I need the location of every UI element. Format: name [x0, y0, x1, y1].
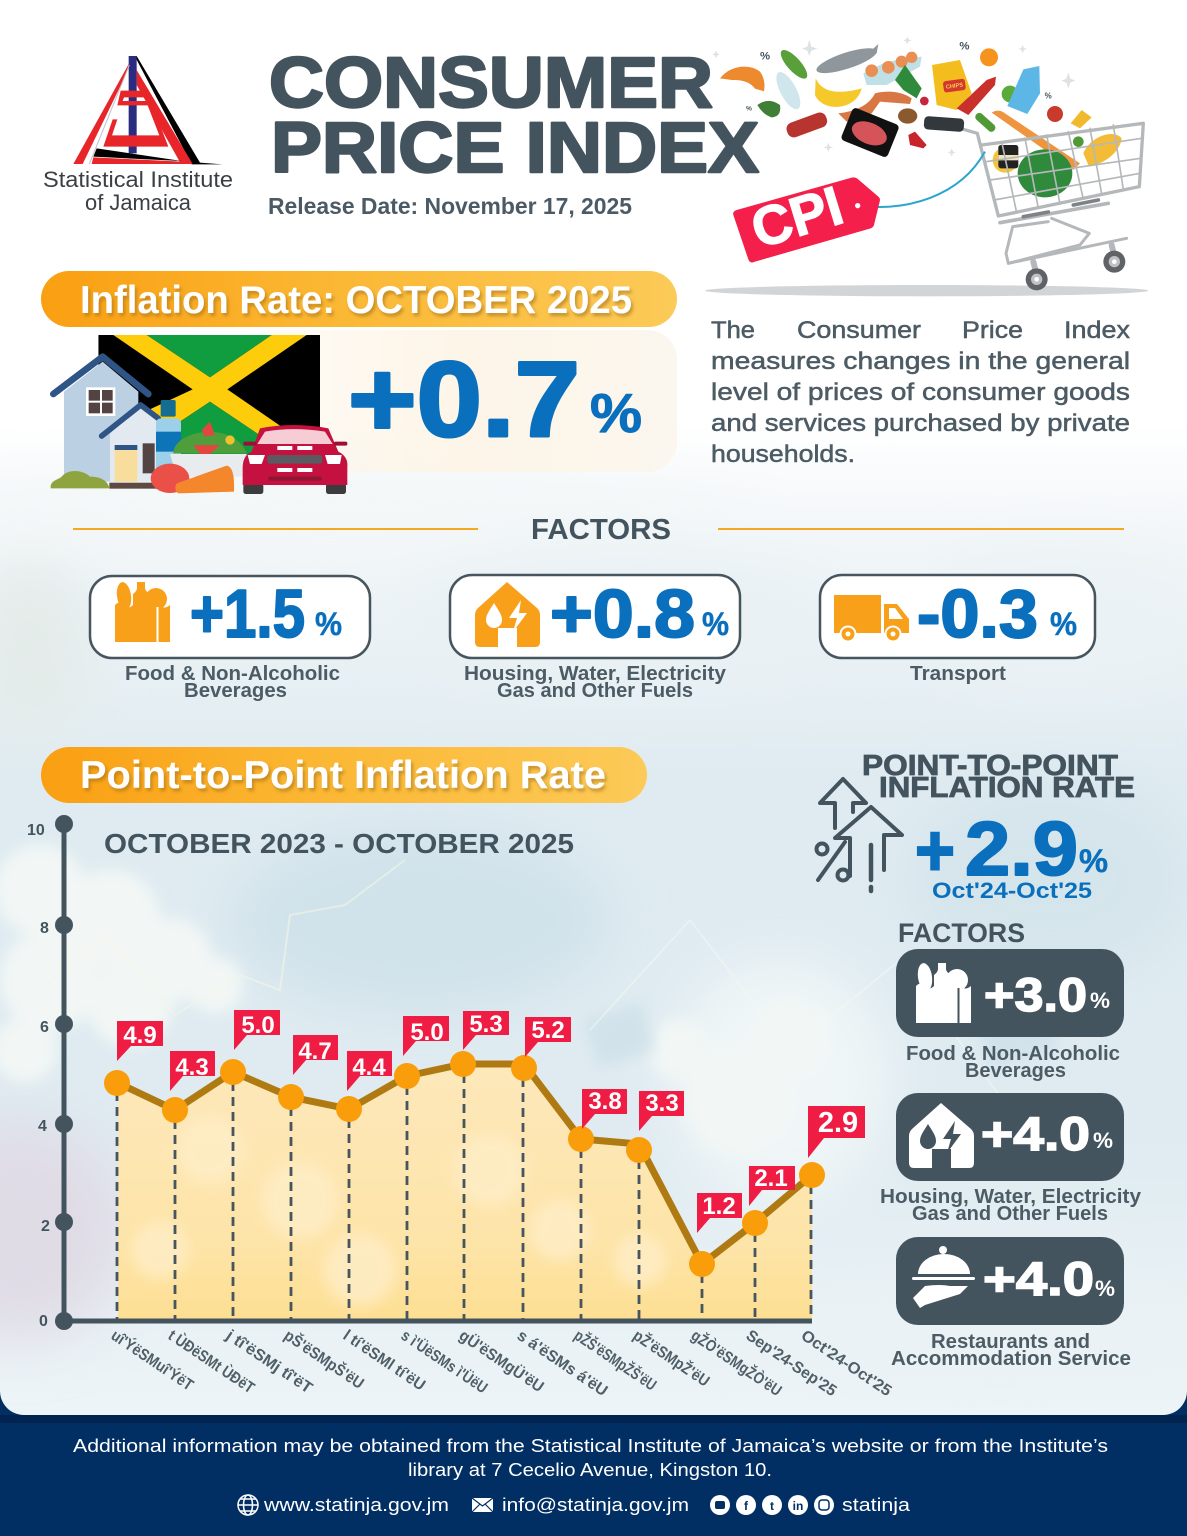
logo wordmark: Statistical Institute [43, 167, 233, 192]
label: Housing, Water, Electricity [464, 663, 727, 685]
x axis labels: gŽÒ'ëSMgŽÒ'ëU [688, 1326, 785, 1400]
cart contents [992, 111, 1122, 197]
x axis labels: s ì'ÜëSMs ì'ÜëU [398, 1326, 491, 1397]
x axis labels: s á'ëSMs á'ëU [514, 1327, 610, 1400]
label: Food & Non-Alcoholic [125, 663, 340, 685]
data labels: 2.1 [754, 1165, 788, 1192]
value: % [702, 606, 729, 642]
icon: truck [834, 595, 909, 642]
Jamaican flag [98, 335, 320, 456]
title: CONSUMER [269, 44, 713, 123]
data labels: 1.2 [702, 1193, 736, 1220]
period label: Oct'24-Oct'25 [932, 878, 1092, 903]
icon: grocery bag [916, 962, 971, 1023]
title: PRICE INDEX [271, 109, 759, 188]
heading pill: inflation rate: Inflation Rate: OCTOBER 2025 [80, 279, 632, 322]
x axis labels: gÜ'ëSMgÜ'ëU [456, 1326, 548, 1396]
value: % [315, 606, 342, 642]
icon: grocery bag [115, 581, 170, 642]
CPI definition text: measures changes in the general [711, 348, 1130, 375]
label [125, 663, 340, 702]
y axis: 2 [41, 1218, 50, 1235]
ground shadow [705, 285, 1148, 296]
icon: serving cloche on hand [912, 1246, 975, 1308]
summary heading: INFLATION RATE [879, 772, 1135, 804]
label: Beverages [965, 1060, 1066, 1082]
logo wordmark [43, 167, 233, 215]
contact: social media [710, 1495, 911, 1515]
cart basket and frame [963, 123, 1143, 275]
label: Gas and Other Fuels [497, 680, 693, 702]
label: Restaurants and [931, 1331, 1090, 1353]
y axis: 6 [40, 1019, 49, 1036]
x axis labels: l tí'ëSMl tí'ëU [340, 1327, 428, 1394]
title [269, 44, 759, 188]
data labels: 5.0 [410, 1019, 444, 1046]
groceries: % [1045, 91, 1052, 100]
house [51, 357, 162, 489]
factor card: housing [450, 575, 740, 702]
label: Gas and Other Fuels [912, 1203, 1108, 1225]
label: Food & Non-Alcoholic [906, 1043, 1120, 1065]
data labels: 5.0 [241, 1012, 275, 1039]
data line [118, 1064, 812, 1264]
y axis: 0 [39, 1313, 48, 1330]
data points [104, 1051, 825, 1277]
icon: house with water and power [909, 1103, 974, 1168]
CPI definition text: and services purchased by private [711, 410, 1130, 437]
CPI definition text: The [711, 317, 755, 344]
heading pill: point-to-point inflation rate: Point-to-Point Inflation Rate [80, 754, 606, 797]
data labels: 3.3 [645, 1090, 679, 1117]
y axis: 10 [27, 822, 45, 839]
water bottle [156, 400, 181, 482]
tag string [858, 152, 985, 207]
logo: Statistical Institute of Jamaica [43, 56, 233, 215]
y axis [27, 815, 812, 1330]
footer [0, 1391, 1187, 1536]
data labels: 4.3 [175, 1054, 209, 1081]
heading: factors: FACTORS [531, 514, 671, 546]
label [906, 1043, 1120, 1082]
area under line [118, 1060, 812, 1321]
cart handle [924, 116, 964, 132]
CPI definition text: Price [962, 317, 1023, 344]
footer note: library at 7 Cecelio Avenue, Kingston 10. [408, 1460, 772, 1480]
value: +2.9 percent [915, 807, 1108, 892]
data labels: 4.4 [352, 1054, 386, 1081]
label: Accommodation Service [891, 1348, 1131, 1370]
contact: website: www.statinja.gov.jm [263, 1495, 449, 1515]
contact: social media: statinja [842, 1495, 911, 1515]
footer note [73, 1436, 1108, 1480]
x axis labels: pŽŠ'ëSMpŽŠ'ëU [571, 1326, 660, 1394]
CPI definition text: Consumer [797, 317, 921, 344]
factors heading: FACTORS [898, 918, 1025, 948]
x axis labels: Sep'24-Sep'25 [743, 1327, 839, 1400]
data labels: 4.7 [298, 1038, 332, 1065]
logo wordmark: of Jamaica [85, 190, 192, 215]
value background [240, 330, 677, 472]
data labels: 5.3 [469, 1011, 503, 1038]
data labels [117, 1010, 865, 1233]
sparkles [712, 37, 1075, 157]
release date: Release Date: November 17, 2025 [268, 193, 632, 219]
panel: headline inflation [51, 330, 677, 494]
label [464, 663, 727, 702]
value: +1.5 [190, 576, 305, 652]
y axis: 4 [38, 1118, 47, 1135]
x axis labels [108, 1326, 894, 1400]
groceries: % [959, 40, 969, 52]
value: +4.0 [983, 1252, 1094, 1305]
label: Beverages [184, 680, 287, 702]
logo triangle mark [73, 56, 223, 164]
value: +3.0 [984, 968, 1087, 1021]
groceries: % [760, 50, 770, 62]
chart: point-to-point inflation [27, 815, 894, 1400]
factor card: food [90, 576, 370, 702]
CPI definition text: households. [711, 441, 855, 468]
data labels: 4.9 [123, 1022, 157, 1049]
heading pill: inflation rate [41, 271, 677, 327]
summary heading: POINT-TO-POINT [862, 750, 1118, 782]
value: +0.7 percent: % [590, 382, 642, 444]
icon: rising arrows and percent [816, 779, 902, 891]
label [891, 1331, 1131, 1370]
contact: social media: t [770, 1499, 774, 1513]
data labels: 2.9 [818, 1107, 858, 1139]
x axis labels: pŠ'ëSMpŠ'ëU [281, 1326, 368, 1393]
summary heading [862, 750, 1135, 804]
dark card: housing [880, 1093, 1142, 1225]
dashed drop lines [117, 1074, 811, 1320]
x axis labels: t ÙÐëSMt ÙÐëT [165, 1326, 258, 1397]
y axis: 8 [40, 920, 49, 937]
panel: point-to-point summary [816, 750, 1142, 1370]
contact: social media: in [793, 1499, 803, 1513]
data labels: 3.8 [588, 1088, 622, 1115]
illustration: flag, house, food and car [51, 335, 347, 494]
groceries: % [746, 106, 752, 113]
illustration: shopping cart with groceries and CPI tag [705, 37, 1148, 296]
value: -0.3 [917, 576, 1038, 652]
CPI definition text: Index [1064, 317, 1130, 344]
label: Housing, Water, Electricity [880, 1186, 1142, 1208]
chart subtitle: OCTOBER 2023 - OCTOBER 2025 [104, 828, 574, 859]
x axis labels: j tî'ëSMj tî'ëT [222, 1327, 315, 1397]
contact: social media: f [744, 1499, 749, 1513]
red car [243, 425, 347, 494]
CPI definition text [711, 317, 1130, 468]
CPI price tag: CPI [744, 174, 850, 260]
value: +4.0 [981, 1107, 1090, 1160]
value: +2.9 percent: % [1079, 843, 1108, 879]
tomato and carrot [151, 464, 234, 493]
page background panel [0, 472, 1187, 1415]
CPI definition text: level of prices of consumer goods [711, 379, 1130, 406]
dark card: food [896, 949, 1124, 1082]
groceries [720, 40, 1092, 158]
factor card: transport [820, 575, 1095, 685]
value: +0.8 [550, 576, 695, 652]
x axis labels: uî'ÝëSMuî'ÝëT [108, 1326, 197, 1395]
data labels: 5.2 [531, 1017, 565, 1044]
value: % [1095, 1276, 1115, 1301]
label [880, 1186, 1142, 1225]
dark card: restaurants [891, 1237, 1131, 1370]
heading pill: point-to-point inflation rate [41, 747, 647, 803]
value: % [1050, 606, 1077, 642]
contact: email: info@statinja.gov.jm [502, 1495, 689, 1515]
footer note: Additional information may be obtained from the Statistical Institute of Jamaica’s website or from the Institute’s [73, 1436, 1108, 1456]
x axis labels: pŽ'ëSMpŽ'ëU [630, 1326, 713, 1391]
groceries: CHIPS [946, 82, 964, 91]
value: +0.7 percent: +0.7 [348, 339, 580, 459]
icon: house with water and power [475, 582, 540, 647]
cart wheels [1026, 251, 1125, 290]
value: +2.9 percent: + [915, 811, 955, 891]
x axis labels: Oct'24-Oct'25 [798, 1327, 894, 1400]
value: % [1093, 1128, 1113, 1153]
value: % [1090, 988, 1110, 1013]
label: Transport [910, 663, 1006, 685]
salad bowl [170, 422, 247, 477]
value: +2.9 percent: 2.9 [965, 807, 1078, 892]
